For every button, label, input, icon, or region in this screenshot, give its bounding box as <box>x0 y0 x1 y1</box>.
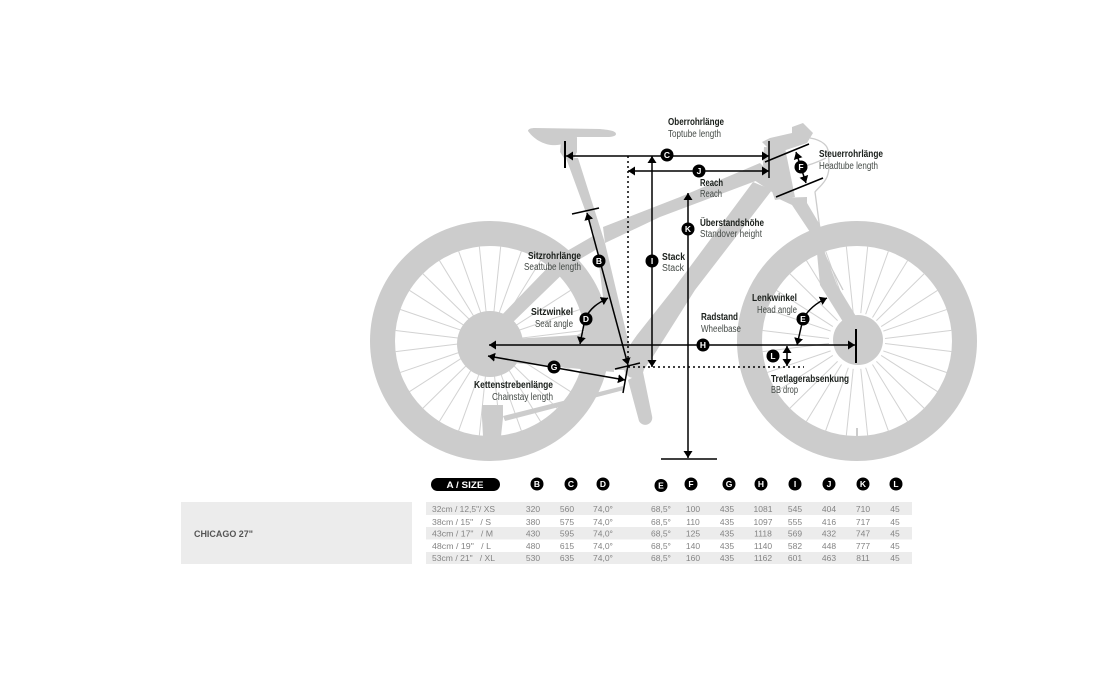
column H <box>754 478 768 490</box>
bike silhouette <box>377 123 970 454</box>
row L: 1140 <box>754 541 772 551</box>
dotted reference horizontal <box>628 366 804 368</box>
table header <box>431 478 902 492</box>
column J <box>822 478 836 490</box>
label: bb drop: Tretlagerabsenkung <box>771 374 849 385</box>
row M: 43cm / 17" / M <box>432 528 493 538</box>
row M: 595 <box>560 528 574 538</box>
row XS: 435 <box>720 504 734 514</box>
row M: 125 <box>686 528 700 538</box>
row XS: 404 <box>822 504 836 514</box>
dotted reference vertical <box>627 156 629 367</box>
column C <box>564 478 578 490</box>
row XS: 560 <box>560 504 574 514</box>
row M: 68,5° <box>651 528 671 538</box>
label: top tube length: Toptube length <box>668 129 721 140</box>
row XL: 45 <box>890 553 900 563</box>
row S: 575 <box>560 517 574 527</box>
row XS: 100 <box>686 504 700 514</box>
row L: 480 <box>526 541 540 551</box>
label: standover height: Überstandshöhe <box>700 216 764 229</box>
row S: 110 <box>686 517 700 527</box>
label: seat tube length <box>524 251 581 273</box>
row XL: 463 <box>822 553 836 563</box>
row M: 747 <box>856 528 870 538</box>
row XL: 435 <box>720 553 734 563</box>
size pill: A / SIZE <box>446 480 484 490</box>
size pill <box>431 478 500 491</box>
column F: F <box>688 479 694 489</box>
row XL: 601 <box>788 553 802 563</box>
row XS: 45 <box>890 504 900 514</box>
row XS: 710 <box>856 504 870 514</box>
column I <box>788 478 802 490</box>
rear wheel <box>377 228 603 454</box>
column B: B <box>534 479 540 489</box>
I: stack <box>651 156 653 367</box>
row S: 1097 <box>754 517 773 527</box>
badge B: B <box>596 256 602 266</box>
column B <box>530 478 544 490</box>
row L: 435 <box>720 541 734 551</box>
badge F <box>794 160 808 174</box>
row XL: 1162 <box>754 553 772 563</box>
dimension lines <box>488 141 856 459</box>
label: bb drop: BB drop <box>771 385 798 396</box>
row XS: 1081 <box>754 504 773 514</box>
row XS: 545 <box>788 504 802 514</box>
row XL: 68,5° <box>651 553 671 563</box>
front wheel <box>744 228 970 454</box>
row XS: 320 <box>526 504 540 514</box>
badge J: J <box>697 166 702 176</box>
row L: 777 <box>856 541 870 551</box>
F: head tube arrow <box>765 144 823 197</box>
H: wheelbase <box>489 329 856 363</box>
column E <box>654 479 668 492</box>
frame <box>482 158 790 436</box>
badge C: C <box>664 150 670 160</box>
row S: 380 <box>526 517 540 527</box>
column C: C <box>568 479 574 489</box>
column F <box>684 478 698 490</box>
badge F: F <box>798 162 804 172</box>
badge C <box>660 148 674 162</box>
row S: 435 <box>720 517 734 527</box>
column J: J <box>827 479 832 489</box>
label: wheelbase: Radstand <box>701 312 738 323</box>
label: reach <box>700 178 723 200</box>
label: stack <box>662 252 685 274</box>
row XS: 32cm / 12,5"/ XS <box>432 504 495 514</box>
row M: 1118 <box>754 528 772 538</box>
badge I: I <box>651 256 653 266</box>
label: top tube length: Oberrohrlänge <box>668 117 724 128</box>
row S <box>432 517 900 527</box>
badge E <box>796 312 810 326</box>
brake cables <box>795 138 843 290</box>
C: top tube length <box>565 141 769 178</box>
row L: 74,0° <box>593 541 613 551</box>
saddle <box>528 128 616 145</box>
row M <box>426 527 912 540</box>
seat clamp <box>560 137 577 158</box>
label: stack: Stack <box>662 252 685 263</box>
label: head tube length: Headtube length <box>819 161 878 172</box>
row L: 615 <box>560 541 574 551</box>
row M: 569 <box>788 528 802 538</box>
row XL <box>426 552 912 564</box>
label: standover height <box>700 216 764 240</box>
label: head tube length <box>819 149 883 172</box>
G: chainstay length <box>488 356 628 393</box>
column L: L <box>893 479 899 489</box>
column G: G <box>726 479 733 489</box>
E: head angle arrow <box>797 298 827 345</box>
column L <box>890 478 902 490</box>
row XL: 74,0° <box>593 553 613 563</box>
row XL: 53cm / 21" / XL <box>432 553 495 563</box>
badge G: G <box>551 362 558 372</box>
badge K: K <box>685 224 692 234</box>
row M: 45 <box>890 528 900 538</box>
label: wheelbase: Wheelbase <box>701 324 741 335</box>
badge L <box>766 350 780 362</box>
column I: I <box>794 479 796 489</box>
row M: 430 <box>526 528 540 538</box>
badge K <box>682 222 694 236</box>
J: reach <box>628 170 769 172</box>
label: chainstay length: Chainstay length <box>492 392 553 403</box>
column K: K <box>860 479 867 489</box>
row XL: 160 <box>686 553 700 563</box>
row S: 38cm / 15" / S <box>432 517 491 527</box>
label: standover height: Standover height <box>700 229 762 240</box>
row M: 74,0° <box>593 528 613 538</box>
label: seat angle <box>531 307 573 330</box>
label: seat tube length: Seattube length <box>524 262 581 273</box>
model name panel: CHICAGO 27" <box>194 529 253 540</box>
badge H <box>696 338 710 352</box>
row L: 48cm / 19" / L <box>432 541 491 551</box>
column D <box>596 478 610 490</box>
column G <box>722 478 736 490</box>
column D: D <box>600 479 606 489</box>
label: reach: Reach <box>700 189 722 200</box>
model name panel <box>181 502 412 564</box>
badge E: E <box>800 314 806 324</box>
label: chainstay length <box>474 380 553 403</box>
row XS: 74,0° <box>593 504 613 514</box>
stem and handlebar <box>762 123 813 152</box>
row XL: 811 <box>856 553 870 563</box>
row S: 45 <box>890 517 900 527</box>
badge G <box>548 360 560 374</box>
row L: 68,5° <box>651 541 671 551</box>
label: head tube length: Steuerrohrlänge <box>819 149 883 160</box>
row S: 717 <box>856 517 870 527</box>
badge D <box>580 312 592 326</box>
row L: 448 <box>822 541 836 551</box>
label: head angle: Lenkwinkel <box>752 293 797 304</box>
row L: 582 <box>788 541 802 551</box>
B: seat tube length <box>572 208 640 369</box>
row S: 74,0° <box>593 517 613 527</box>
row M: 435 <box>720 528 734 538</box>
label: seat angle: Sitzwinkel <box>531 307 573 318</box>
row M: 432 <box>822 528 836 538</box>
label: stack: Stack <box>662 263 685 274</box>
label: reach: Reach <box>700 178 723 189</box>
label: bb drop <box>771 374 849 396</box>
badge D: D <box>583 314 589 324</box>
row S: 416 <box>822 517 836 527</box>
D: seat angle arrow <box>580 298 608 344</box>
column H: H <box>758 479 764 489</box>
row XS: 68,5° <box>651 504 671 514</box>
label: top tube length <box>668 117 724 140</box>
row L: 140 <box>686 541 700 551</box>
badge B <box>592 254 606 268</box>
row XS <box>426 502 912 515</box>
fork <box>777 197 857 325</box>
row L <box>432 541 900 551</box>
label: seat angle: Seat angle <box>535 319 573 330</box>
column K <box>856 478 870 490</box>
L: bb drop arrow <box>786 346 788 366</box>
column E: E <box>658 480 664 490</box>
label: head angle <box>752 293 797 316</box>
badge I <box>646 254 658 268</box>
label: head angle: Head angle <box>757 305 797 316</box>
row XL: 635 <box>560 553 574 563</box>
row XL: 530 <box>526 553 540 563</box>
label: chainstay length: Kettenstrebenlänge <box>474 380 553 391</box>
badge J <box>692 164 706 178</box>
row L: 45 <box>890 541 900 551</box>
size table <box>426 502 912 564</box>
badge H: H <box>700 340 706 350</box>
badge L: L <box>770 351 776 361</box>
row S: 555 <box>788 517 802 527</box>
row S: 68,5° <box>651 517 671 527</box>
head tube <box>763 147 795 200</box>
K: standover height <box>661 193 717 459</box>
label: seat tube length: Sitzrohrlänge <box>528 251 581 262</box>
label: wheelbase <box>701 312 741 335</box>
